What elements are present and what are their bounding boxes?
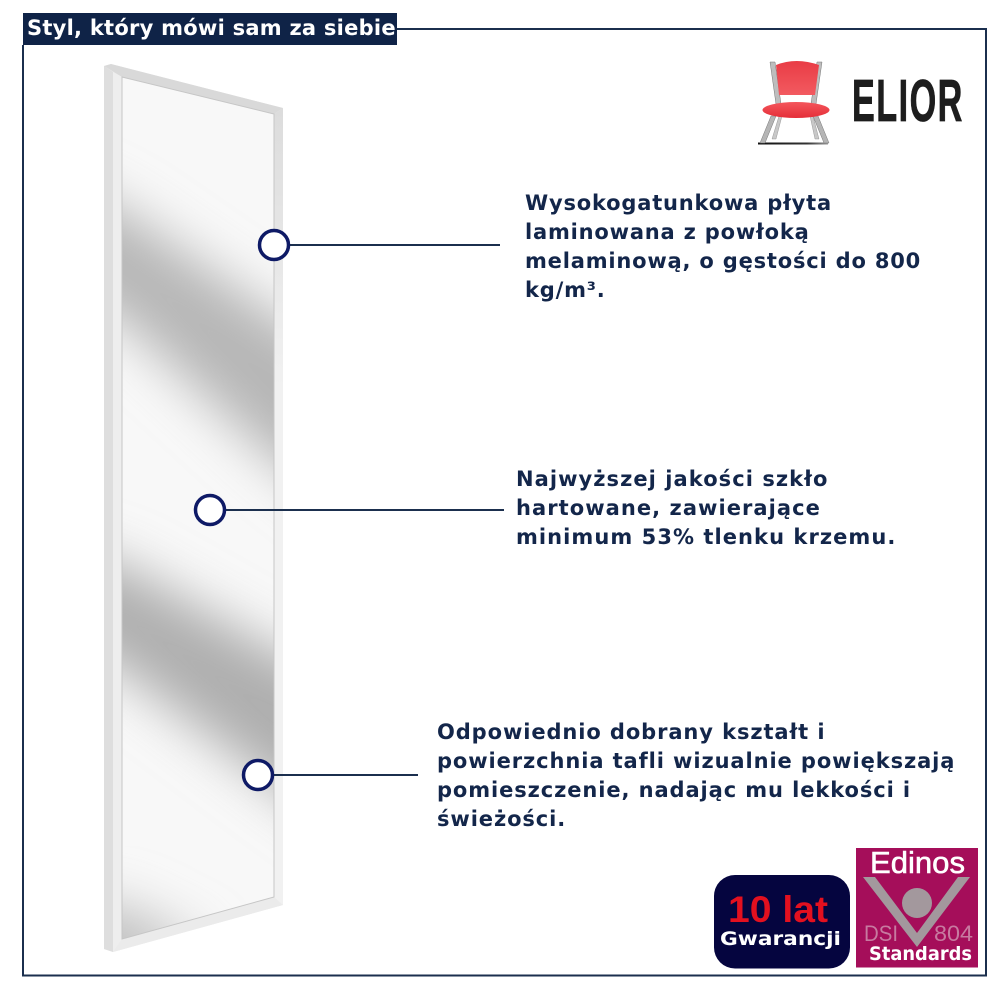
icon: red chair logo (758, 61, 830, 144)
callout line 2 (224, 509, 504, 511)
logo wordmark: ELIOR (852, 68, 964, 134)
text block 1: melaminową, o gęstości do 800 (525, 249, 921, 273)
warranty badge: 10 lat (728, 889, 828, 930)
Edinos standards badge: 804 (934, 921, 973, 946)
Edinos standards badge: Standards (869, 943, 972, 965)
warranty badge (714, 875, 850, 968)
callout marker 1 (260, 230, 288, 260)
text block 1: laminowana z powłoką (525, 220, 810, 244)
text block 3: powierzchnia tafli wizualnie powiększają (437, 749, 955, 773)
text block 3: pomieszczenie, nadając mu lekkości i (437, 778, 911, 802)
callout line 1 (288, 244, 500, 246)
callout marker 3 (244, 760, 272, 790)
text block 2 (516, 467, 896, 549)
callout marker 2 (196, 496, 224, 524)
warranty badge: Gwarancji (720, 928, 841, 950)
mirror glass (122, 78, 274, 938)
mirror glass edge (122, 77, 274, 939)
mirror frame (104, 64, 283, 952)
Edinos standards badge (856, 845, 978, 968)
text block 1: kg/m³. (525, 278, 606, 302)
text block 1 (525, 191, 921, 302)
text block 3: świeżości. (437, 807, 566, 831)
title: Styl, który mówi sam za siebie (27, 16, 396, 40)
text block 2: minimum 53% tlenku krzemu. (516, 525, 896, 549)
callout line 3 (272, 774, 418, 776)
Edinos standards badge: DSI (864, 921, 898, 946)
Edinos standards badge: Edinos (870, 845, 965, 880)
text block 2: Najwyższej jakości szkło (516, 467, 828, 491)
text block 3: Odpowiednio dobrany kształt i (437, 720, 825, 744)
text block 3 (437, 720, 955, 831)
mirror (104, 64, 283, 952)
text block 1: Wysokogatunkowa płyta (525, 191, 832, 215)
text block 2: hartowane, zawierające (516, 496, 821, 520)
